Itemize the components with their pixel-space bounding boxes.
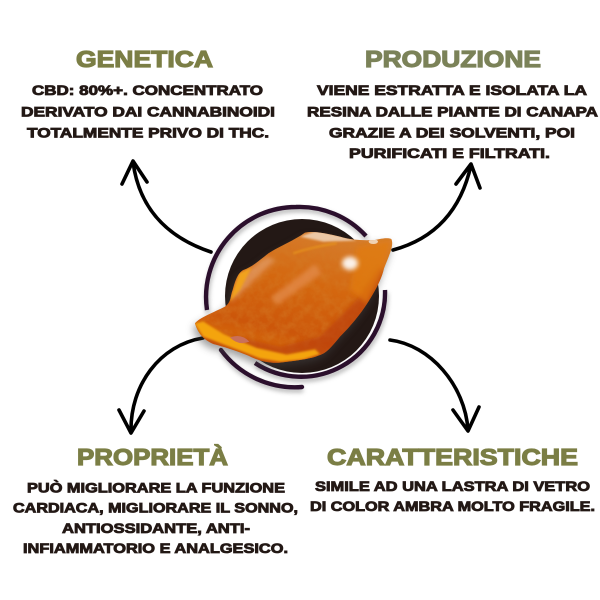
text block: caratteristiche	[310, 478, 595, 514]
text block: proprietà: ANTIOSSIDANTE, ANTI-	[62, 520, 250, 536]
text block: produzione: RESINA DALLE PIANTE DI CANAPA	[307, 104, 598, 120]
panel: produzione	[307, 46, 598, 161]
text block: caratteristiche: SIMILE AD UNA LASTRA DI VETRO	[315, 478, 590, 494]
text block: proprietà: CARDIACA, MIGLIORARE IL SONNO,	[13, 500, 298, 516]
arrow: to Caratteristiche	[390, 340, 479, 431]
arrow: to Genetica	[122, 161, 211, 252]
text block: genetica: DERIVATO DAI CANNABINOIDI	[21, 104, 275, 120]
text block: produzione	[307, 82, 598, 161]
heading: proprietà: PROPRIETÀ	[77, 443, 228, 470]
text block: genetica: CBD: 80%+. CONCENTRATO	[32, 82, 263, 98]
panel: genetica	[21, 46, 275, 140]
text block: proprietà	[13, 478, 298, 556]
text block: proprietà: PUÒ MIGLIORARE LA FUNZIONE	[27, 478, 285, 496]
panel: caratteristiche	[310, 444, 595, 514]
central emblem: disc and rings	[206, 207, 386, 390]
text block: produzione: VIENE ESTRATTA E ISOLATA LA	[317, 82, 587, 98]
text block: caratteristiche: DI COLOR AMBRA MOLTO FRAGILE.	[310, 498, 595, 514]
panel: proprietà	[13, 443, 298, 556]
text block: proprietà: INFIAMMATORIO E ANALGESICO.	[23, 540, 288, 556]
heading: genetica: GENETICA	[76, 46, 213, 72]
arrow: to Proprietà	[119, 338, 203, 433]
text block: produzione: PURIFICATI E FILTRATI.	[349, 145, 550, 161]
heading: caratteristiche: CARATTERISTICHE	[327, 444, 578, 470]
arrow: to Produzione	[393, 164, 480, 250]
heading: produzione: PRODUZIONE	[365, 46, 541, 72]
text block: genetica	[21, 82, 275, 140]
text block: produzione: GRAZIE A DEI SOLVENTI, POI	[329, 124, 575, 140]
text block: genetica: TOTALMENTE PRIVO DI THC.	[27, 124, 269, 140]
amber resin nugget	[189, 232, 395, 372]
